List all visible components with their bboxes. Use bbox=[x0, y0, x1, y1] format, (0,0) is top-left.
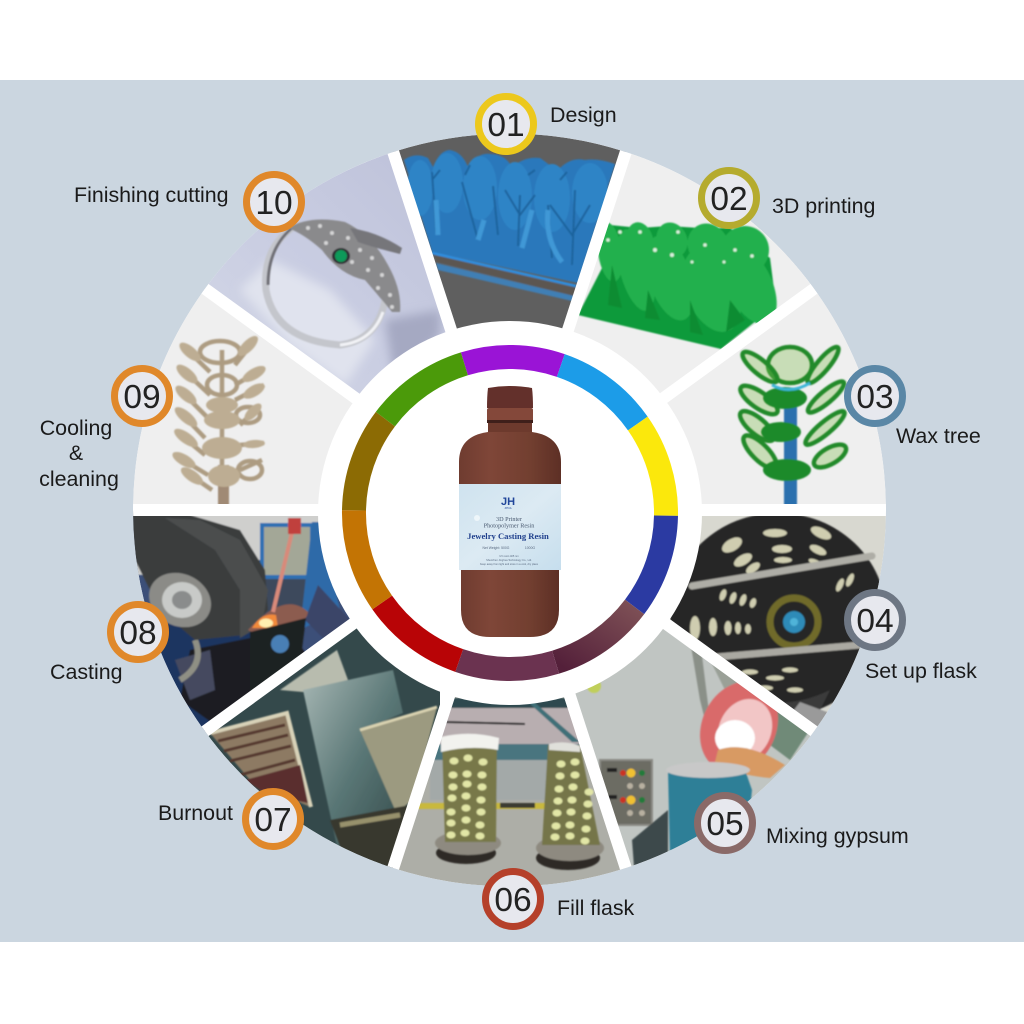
step 10 bbox=[74, 174, 302, 230]
bottle label: Net Weight: 500G bbox=[483, 546, 510, 550]
bottle label: Photopolymer Resin bbox=[484, 522, 534, 530]
bottle label: 1000G bbox=[525, 546, 535, 550]
step 08: Casting bbox=[50, 660, 123, 684]
step 03 bbox=[848, 368, 981, 448]
bottle label: Shenzhen Jinghua Technology Co., Ltd. bbox=[486, 558, 532, 562]
colour ring bbox=[354, 357, 666, 669]
step 04: Set up flask bbox=[865, 659, 977, 683]
step 02: 02 bbox=[710, 181, 748, 218]
step 10: 10 bbox=[255, 185, 293, 222]
step 01 bbox=[478, 96, 617, 152]
step 08 bbox=[50, 604, 166, 684]
bottle label: JH bbox=[501, 496, 515, 508]
step 05 bbox=[698, 796, 909, 850]
step 02 bbox=[702, 170, 875, 226]
step 09: cleaning bbox=[39, 467, 119, 491]
bottle label bbox=[459, 484, 561, 570]
step 03: 03 bbox=[856, 379, 894, 416]
panel: 01 design bbox=[394, 134, 626, 328]
step 09: Cooling bbox=[40, 416, 112, 440]
step 09 bbox=[39, 368, 170, 491]
panel: 04 set up flask bbox=[670, 516, 886, 729]
panel: 06 fill flask bbox=[394, 697, 625, 886]
bottle label: Keep away from light and store in a cool, dry place bbox=[480, 562, 539, 566]
step 07: 07 bbox=[254, 802, 292, 839]
step 07: Burnout bbox=[158, 801, 233, 825]
step 01: Design bbox=[550, 103, 617, 127]
step 05: 05 bbox=[706, 806, 744, 843]
panel: 08 casting bbox=[133, 511, 350, 732]
step 03: Wax tree bbox=[896, 424, 981, 448]
panel: 07 burnout bbox=[200, 620, 440, 880]
step 09: 09 bbox=[123, 379, 161, 416]
step 04 bbox=[848, 592, 977, 683]
bottle label: Jewelry Casting Resin bbox=[467, 531, 549, 541]
step 02: 3D printing bbox=[772, 194, 875, 218]
centre hub bbox=[318, 321, 702, 705]
bottle label: 3D Printer bbox=[496, 516, 522, 523]
step 06: 06 bbox=[494, 882, 532, 919]
step 10: Finishing cutting bbox=[74, 183, 229, 207]
step 01: 01 bbox=[487, 107, 525, 144]
step 07 bbox=[158, 792, 300, 846]
step 09: & bbox=[69, 441, 83, 465]
step 06: Fill flask bbox=[557, 896, 635, 920]
bottle label: UV resin 405 nm bbox=[499, 554, 519, 558]
step 05: Mixing gypsum bbox=[766, 824, 909, 848]
panel: 02 3D printing bbox=[574, 154, 810, 393]
step 08: 08 bbox=[119, 615, 157, 652]
wheel dividers bbox=[133, 152, 886, 868]
resin bottle bbox=[459, 386, 561, 637]
panel: 05 mixing gypsum bbox=[576, 629, 814, 868]
step 04: 04 bbox=[856, 603, 894, 640]
step 06 bbox=[486, 872, 635, 926]
panel: 09 cooling and cleaning bbox=[134, 294, 352, 504]
panel: 10 finishing cutting bbox=[208, 152, 446, 394]
panel: 03 wax tree bbox=[668, 294, 886, 504]
bottle label: JIHUA bbox=[504, 507, 512, 510]
process wheel bbox=[130, 130, 890, 890]
